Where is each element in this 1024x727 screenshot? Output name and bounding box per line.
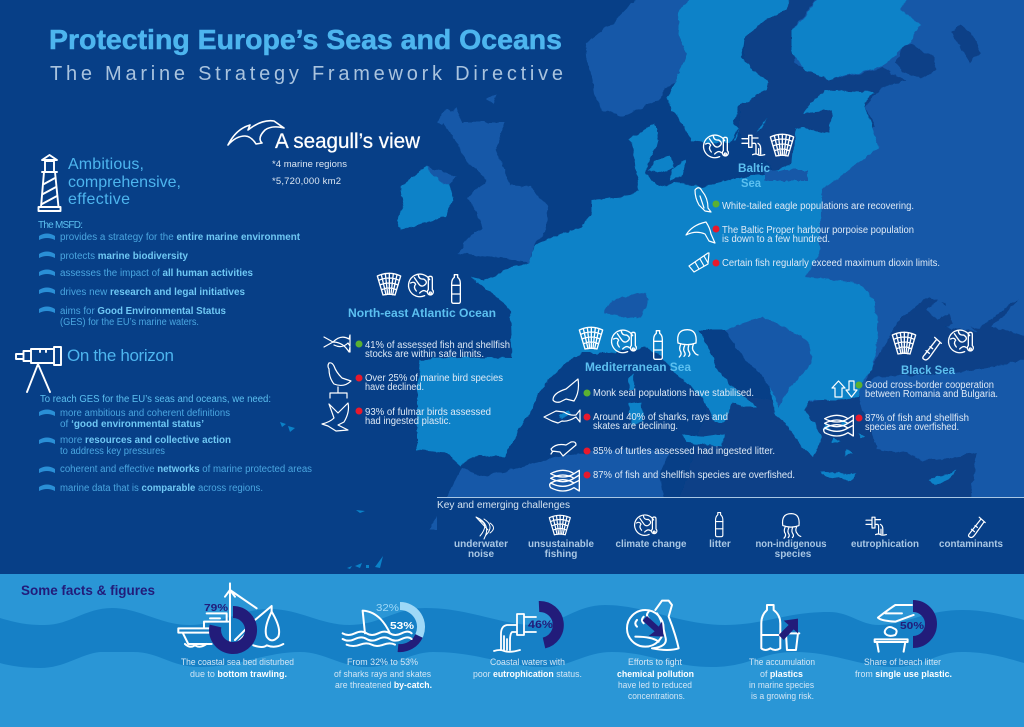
title: Protecting Europe’s Seas and Oceans [49,24,562,55]
seagull facts: *5,720,000 km2 [272,176,341,187]
panel: Black Sea: 87% of fish and shellfish [865,413,969,424]
icon: lighthouse [38,155,60,211]
panel: Mediterranean Sea: Around 40% of sharks, rays and [593,412,728,423]
MSFD list: provides a strategy for the entire marine environment [60,232,301,243]
panel: north-east Atlantic: Over 25% of marine bird species [365,373,503,384]
horizon list: To reach GES for the EU’s seas and oceans, we need: [40,394,271,405]
fact: chemical pollution: chemical pollution [617,669,694,680]
panel: Baltic Sea: The Baltic Proper harbour porpoise population [722,225,914,236]
heading: on the horizon: On the horizon [67,346,174,365]
fact: by-catch: of sharks rays and skates [334,669,431,680]
horizon list: marine data that is comparable across regions. [60,483,263,494]
panel: north-east Atlantic: 41% of assessed fish and shellfish [365,340,510,351]
fact: chemical pollution: have led to reduced [618,680,692,691]
heading: some facts and figures: Some facts & figures [21,583,155,598]
panel: Baltic Sea: is down to a few hundred. [722,234,830,245]
fact: single use plastic [855,605,952,680]
panel: north-east Atlantic [322,273,510,431]
panel: Mediterranean Sea: skates are declining. [593,421,678,432]
panel: Black Sea: between Romania and Bulgaria. [865,389,998,400]
horizon list: coherent and effective networks of marine protected areas [60,464,312,475]
panel: Black Sea: Good cross-border cooperation [865,380,994,391]
panel: Baltic Sea: White-tailed eagle populations are recovering. [722,201,914,212]
fact: chemical pollution: Efforts to fight [628,657,682,668]
MSFD list: protects marine biodiversity [60,251,188,262]
fact: by-catch: 32% [376,602,399,614]
MSFD list: The MSFD: [38,220,83,231]
panel: key and emerging challenges: underwater [454,539,508,550]
fact: bottom trawling: due to bottom trawling. [190,669,287,680]
small Atlantic islands [280,422,383,569]
fact: bottom trawling [178,583,294,680]
key panel backing [437,498,1024,574]
map of Europe [397,0,1024,530]
panel: Black Sea: Black Sea [901,365,956,377]
panel: key and emerging challenges: contaminants [939,539,1003,550]
panel: key and emerging challenges: fishing [545,549,577,560]
fact: by-catch: From 32% to 53% [347,657,419,668]
fact: plastics [749,605,815,702]
panel: facts and figures background [0,574,1024,727]
MSFD list: (GES) for the EU’s marine waters. [60,317,199,328]
panel: key and emerging challenges: non-indigenous [756,539,827,550]
fact: single use plastic: Share of beach litter [864,657,941,668]
fact: by-catch [334,602,432,691]
MSFD list [38,220,301,328]
fact: plastics: is a growing risk. [751,691,814,702]
fact: single use plastic: from single use plastic. [855,669,952,680]
fact: eutrophication: poor eutrophication status. [473,669,582,680]
horizon list [39,394,312,494]
panel: key and emerging challenges: climate change [616,539,687,550]
panel: key and emerging challenges: litter [709,539,731,550]
heading: ambitious, comprehensive, effective: Ambitious, [68,156,144,173]
horizon list: more resources and collective action [60,435,231,446]
horizon list: more ambitious and coherent definitions [60,408,230,419]
subtitle: The Marine Strategy Framework Directive [50,63,563,85]
fact: chemical pollution [617,601,694,702]
panel: Baltic Sea: Certain fish regularly exceed maximum dioxin limits. [722,258,940,269]
panel: key and emerging challenges: species [775,549,812,560]
panel: key and emerging challenges: Key and emerging challenges [437,500,570,511]
panel: Mediterranean Sea: Monk seal populations have stabilised. [593,388,754,399]
panel: key and emerging challenges: noise [468,549,494,560]
fact: by-catch: are threatened by-catch. [335,680,432,691]
icon: telescope [16,347,61,392]
fact: bottom trawling: The coastal sea bed disturbed [181,657,294,668]
fact: plastics: in marine species [749,680,814,691]
fact: plastics: The accumulation [749,657,815,668]
fact: eutrophication [473,606,582,680]
panel: Mediterranean Sea: 85% of turtles assessed had ingested litter. [593,446,775,457]
panel: Black Sea [824,330,998,436]
fact: by-catch: 53% [390,620,415,632]
MSFD list: assesses the impact of all human activities [60,268,253,279]
panel: Mediterranean Sea: Mediterranean Sea [585,362,692,374]
heading: ambitious, comprehensive, effective: effective [68,191,130,208]
panel: north-east Atlantic: had ingested plastic. [365,416,451,427]
horizon list: to address key pressures [60,446,165,457]
fact: eutrophication: Coastal waters with [490,657,565,668]
panel: north-east Atlantic: have declined. [365,382,424,393]
fact: eutrophication: 46% [528,619,553,631]
seagull facts [272,159,347,187]
fact: chemical pollution: concentrations. [628,691,685,702]
seagull facts: *4 marine regions [272,159,347,170]
panel: Baltic Sea: Baltic [738,163,771,175]
panel: key and emerging challenges: unsustainable [528,539,594,550]
panel: Baltic Sea: Sea [741,178,762,190]
panel: key and emerging challenges: eutrophication [851,539,919,550]
fact: plastics: of plastics [760,669,803,680]
fact: single use plastic: 50% [900,620,925,632]
MSFD list: drives new research and legal initiatives [60,287,245,298]
panel: Black Sea: species are overfished. [865,422,959,433]
icon: seagull [228,121,284,145]
panel: Mediterranean Sea [544,327,795,491]
fact: bottom trawling: 79% [204,602,229,614]
horizon list: of ‘good environmental status’ [60,419,204,430]
panel: north-east Atlantic: 93% of fulmar birds assessed [365,407,491,418]
heading: a seagull's view: A seagull’s view [275,130,421,153]
heading: ambitious, comprehensive, effective [68,156,181,208]
panel: north-east Atlantic: North-east Atlantic Ocean [348,308,496,320]
MSFD list: aims for Good Environmental Status [60,306,226,317]
panel: key and emerging challenges [437,497,1024,560]
panel: Baltic Sea [686,134,940,272]
panel: north-east Atlantic: stocks are within safe limits. [365,349,484,360]
panel: Mediterranean Sea: 87% of fish and shellfish species are overfished. [593,470,795,481]
heading: ambitious, comprehensive, effective: comprehensive, [68,174,181,191]
